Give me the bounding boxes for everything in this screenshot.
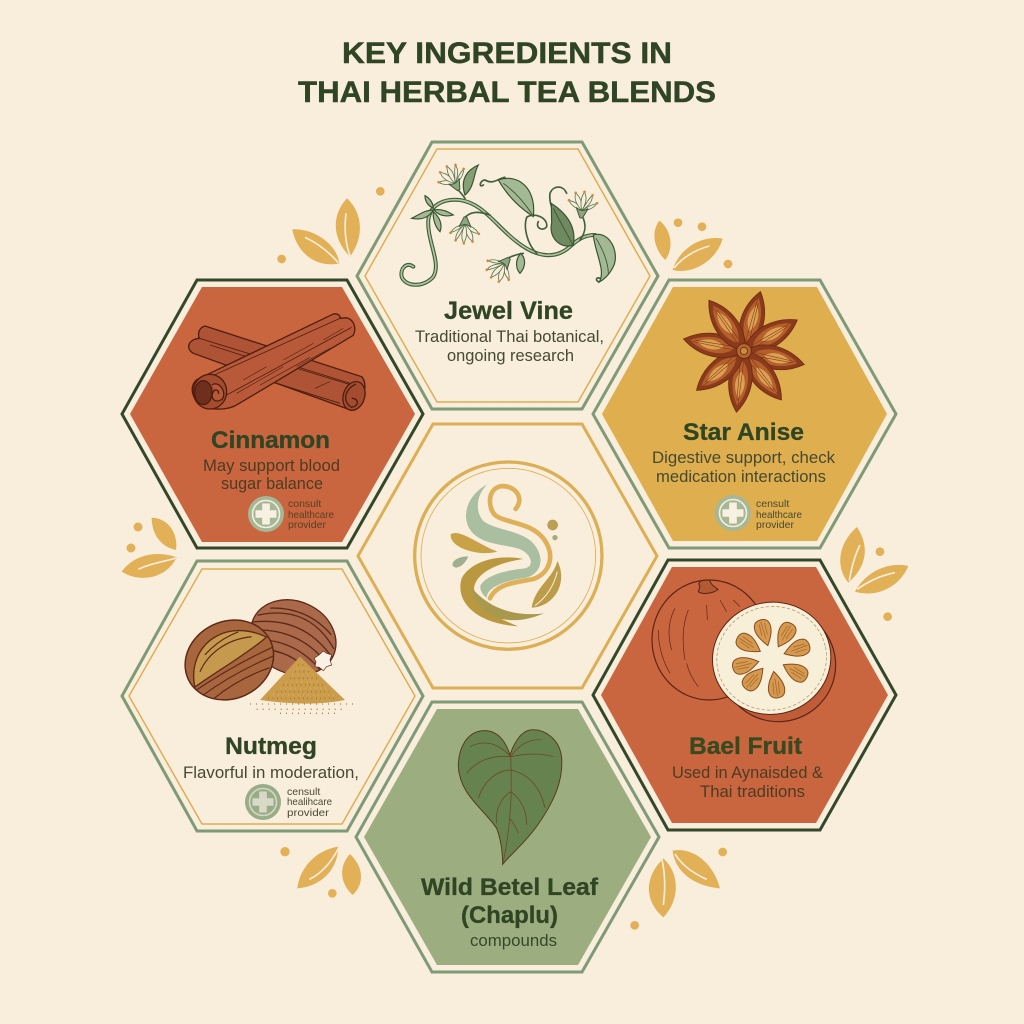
note: consult healthcare provider: healthcare (756, 509, 802, 521)
decorative leaves: bottom right (630, 848, 727, 930)
note: consult healthcare provider: healthcare (288, 509, 334, 521)
heading: bael fruit: Bael Fruit (689, 733, 802, 760)
note: consult healthcare provider: healihcare (287, 796, 332, 808)
heading: wild betel leaf (chaplu): Wild Betel Leaf (421, 874, 599, 901)
icon: heart-shaped betel leaf (458, 730, 562, 864)
panel: star anise (593, 280, 896, 548)
icon: star anise (681, 288, 807, 414)
panel: cinnamon (122, 280, 423, 548)
decorative leaves: top left (277, 187, 385, 264)
panel: wild betel leaf (356, 702, 659, 972)
note: consult healthcare provider: censult (287, 786, 320, 798)
description: nutmeg: Flavorful in moderation, (183, 764, 359, 782)
icon: medical cross badge (245, 784, 281, 820)
note: consult healthcare provider: provider (287, 807, 330, 819)
note: consult healthcare provider (287, 786, 332, 819)
description: star anise: medication interactions (656, 468, 826, 486)
heading: jewel vine: Jewel Vine (444, 297, 573, 325)
icon: medical cross badge (248, 496, 284, 532)
description: bael fruit (672, 764, 823, 801)
note: consult healthcare provider: provider (288, 519, 326, 531)
description: jewel vine (415, 328, 604, 365)
heading: wild betel leaf (chaplu): (Chaplu) (461, 902, 558, 929)
title (298, 37, 716, 109)
title: THAI HERBAL TEA BLENDS (298, 76, 716, 109)
description: cinnamon: sugar balance (221, 475, 323, 493)
panel: jewel vine (357, 142, 658, 409)
heading: star anise: Star Anise (683, 419, 804, 446)
panel: center tea emblem (358, 424, 657, 688)
icon: medical cross badge (715, 495, 751, 531)
title: KEY INGREDIENTS IN (342, 37, 672, 70)
note: consult healthcare provider: censult (756, 498, 789, 510)
description: jewel vine: ongoing research (447, 347, 574, 365)
description: cinnamon: May support blood (203, 457, 340, 475)
panel: bael fruit (593, 560, 896, 830)
icon: bael fruit whole and halved (652, 580, 841, 725)
note: consult healthcare provider: consult (288, 498, 321, 510)
decorative leaves: bottom left (280, 847, 361, 898)
description: jewel vine: Traditional Thai botanical, (415, 328, 604, 346)
heading: nutmeg: Nutmeg (225, 733, 317, 760)
icon: jewel vine illustration (401, 158, 615, 289)
description: cinnamon (203, 457, 340, 493)
description: bael fruit: Thai traditions (700, 783, 805, 801)
description: bael fruit: Used in Aynaisded & (672, 764, 823, 782)
note: consult healthcare provider (756, 498, 802, 531)
icon: cinnamon sticks (189, 314, 369, 413)
heading: cinnamon: Cinnamon (211, 427, 330, 454)
icon: nutmeg and ground powder (172, 586, 357, 714)
decorative leaves: left middle (122, 518, 177, 578)
decorative leaves: top right (654, 218, 732, 271)
heading: wild betel leaf (chaplu) (421, 874, 599, 929)
description: wild betel leaf: compounds (470, 932, 557, 950)
note: consult healthcare provider: provider (756, 519, 794, 531)
icon: tea swirl emblem (415, 462, 602, 649)
decorative leaves: right middle (840, 527, 908, 621)
description: star anise (652, 449, 836, 486)
note: consult healthcare provider (288, 498, 334, 531)
description: star anise: Digestive support, check (652, 449, 836, 467)
panel: nutmeg (122, 561, 423, 831)
